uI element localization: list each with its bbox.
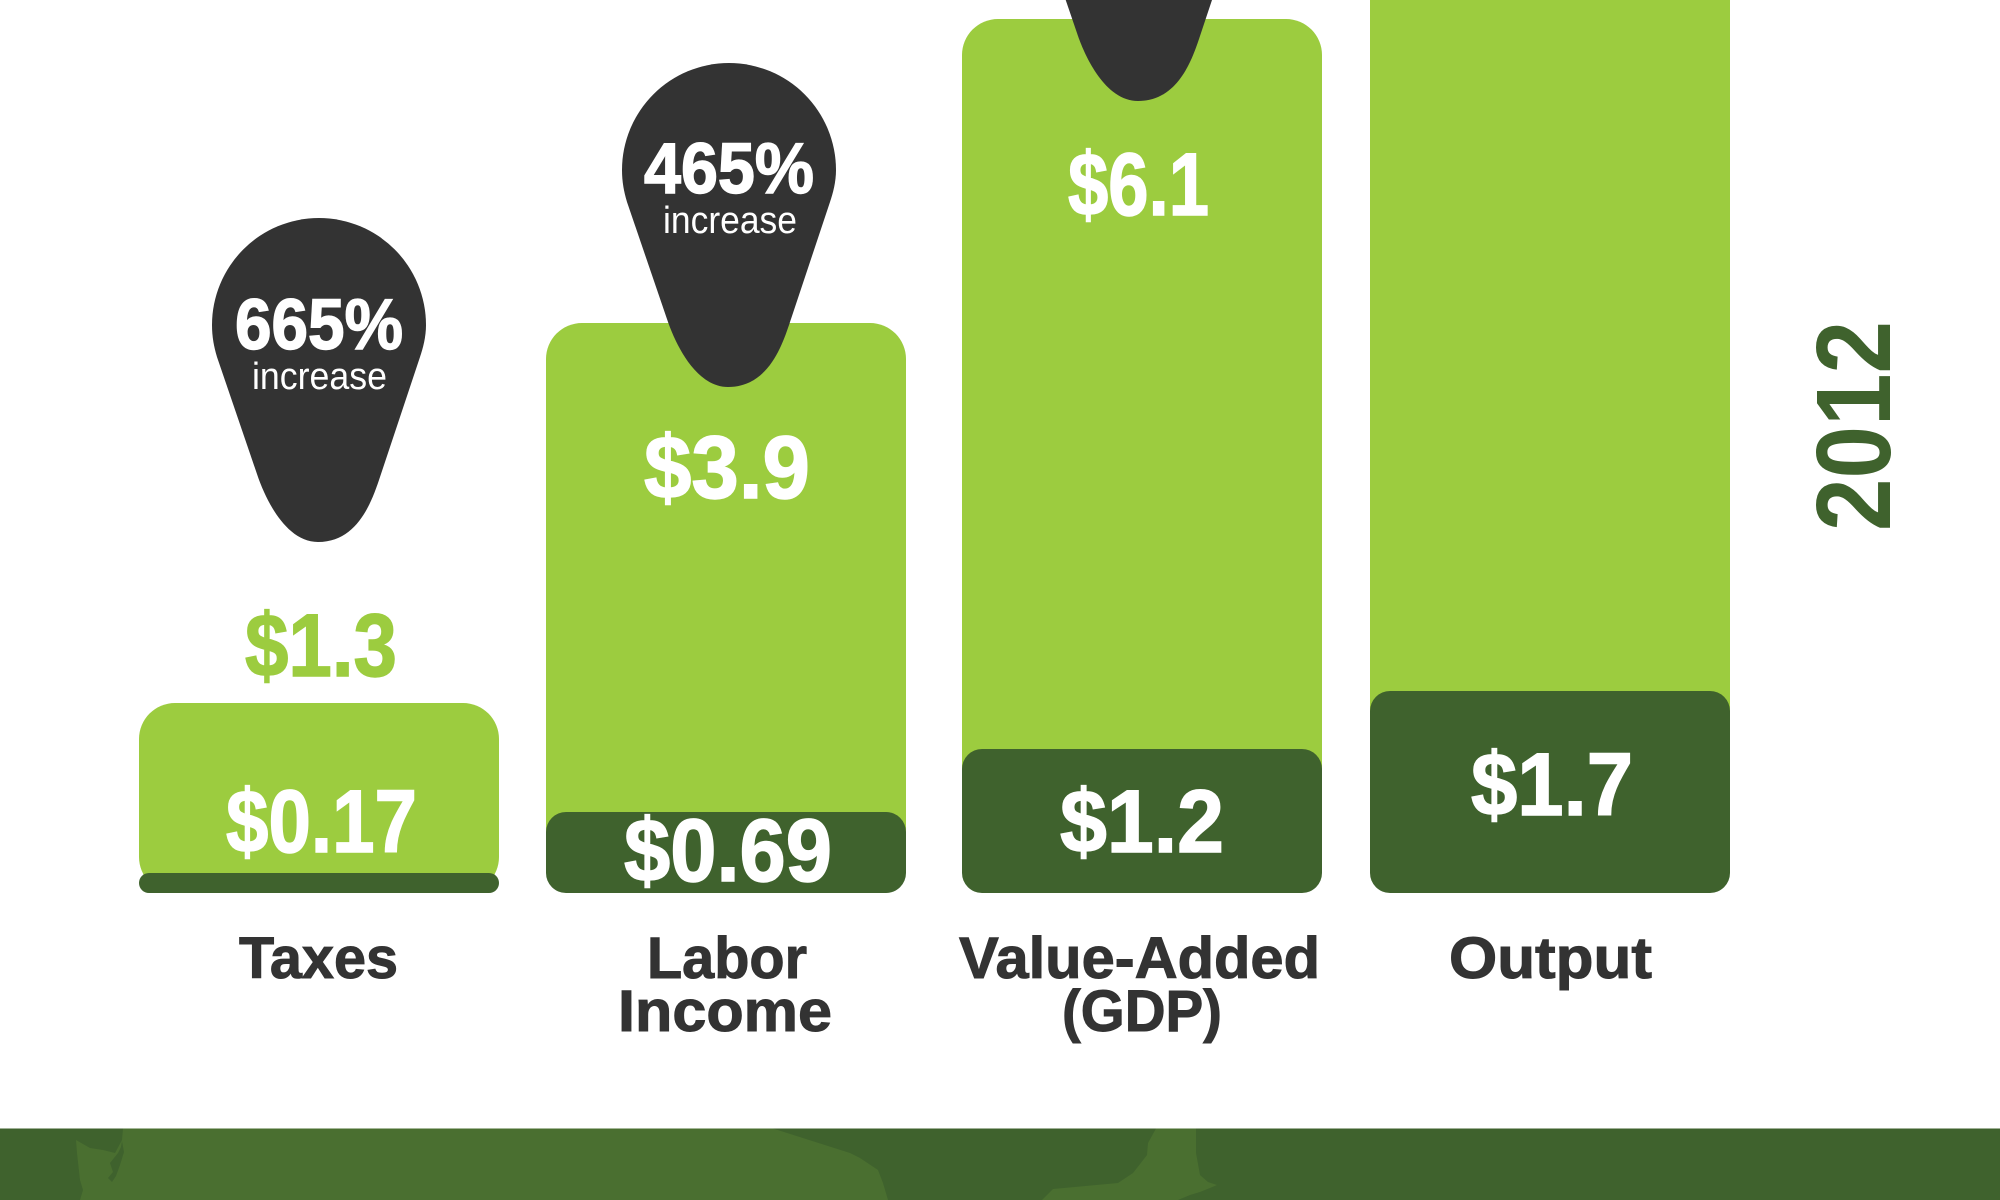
- callout pin: Labor Income 465% increase: increase: [663, 200, 797, 242]
- Output 2012 total bar: [1370, 0, 1730, 893]
- Output label: Output: [1449, 926, 1652, 991]
- Labor Income 2012 total bar: [546, 323, 906, 893]
- GDP base value: $1.2: [1060, 771, 1224, 871]
- Labor Income base bar: [546, 812, 906, 893]
- bar: Value-Added (GDP): [959, 19, 1322, 1044]
- bar: Labor Income: [546, 323, 906, 1044]
- callout pin: Taxes 665% increase: [212, 218, 426, 542]
- Taxes 2012 value: $1.3: [245, 595, 397, 695]
- Taxes base bar: [139, 873, 499, 893]
- callout pin: GDP (cropped at top): [1032, 0, 1246, 101]
- GDP 2012 value: $6.1: [1068, 134, 1209, 234]
- Taxes 2012 total bar: [139, 703, 499, 893]
- map landmass: west: [76, 1128, 888, 1200]
- callout pin: Taxes 665% increase: 665%: [235, 286, 403, 365]
- year label: 2012: 2012: [1795, 321, 1913, 531]
- Labor Income base value: $0.69: [624, 800, 832, 900]
- GDP base bar: [962, 749, 1322, 893]
- bar: Taxes: [139, 595, 499, 991]
- Labor Income label: Income: [618, 979, 832, 1044]
- map inlet sliver: [108, 1141, 124, 1182]
- Labor Income 2012 value: $3.9: [644, 417, 810, 517]
- GDP label: (GDP): [1062, 979, 1222, 1044]
- map landmass: east: [1042, 1128, 1217, 1200]
- Taxes label: Taxes: [239, 926, 398, 991]
- callout pin: Taxes 665% increase: increase: [252, 356, 387, 398]
- callout pin: Labor Income 465% increase: [622, 63, 836, 387]
- GDP label: Value-Added: [959, 926, 1320, 991]
- Output base bar: [1370, 691, 1730, 893]
- bar: Output: [1370, 0, 1730, 991]
- Output base value: $1.7: [1471, 734, 1633, 834]
- GDP 2012 total bar: [962, 19, 1322, 893]
- Taxes base value: $0.17: [226, 771, 417, 871]
- footer band with map silhouette: [0, 1128, 2000, 1200]
- callout pin: Labor Income 465% increase: 465%: [644, 130, 814, 209]
- Labor Income label: Labor: [647, 926, 807, 991]
